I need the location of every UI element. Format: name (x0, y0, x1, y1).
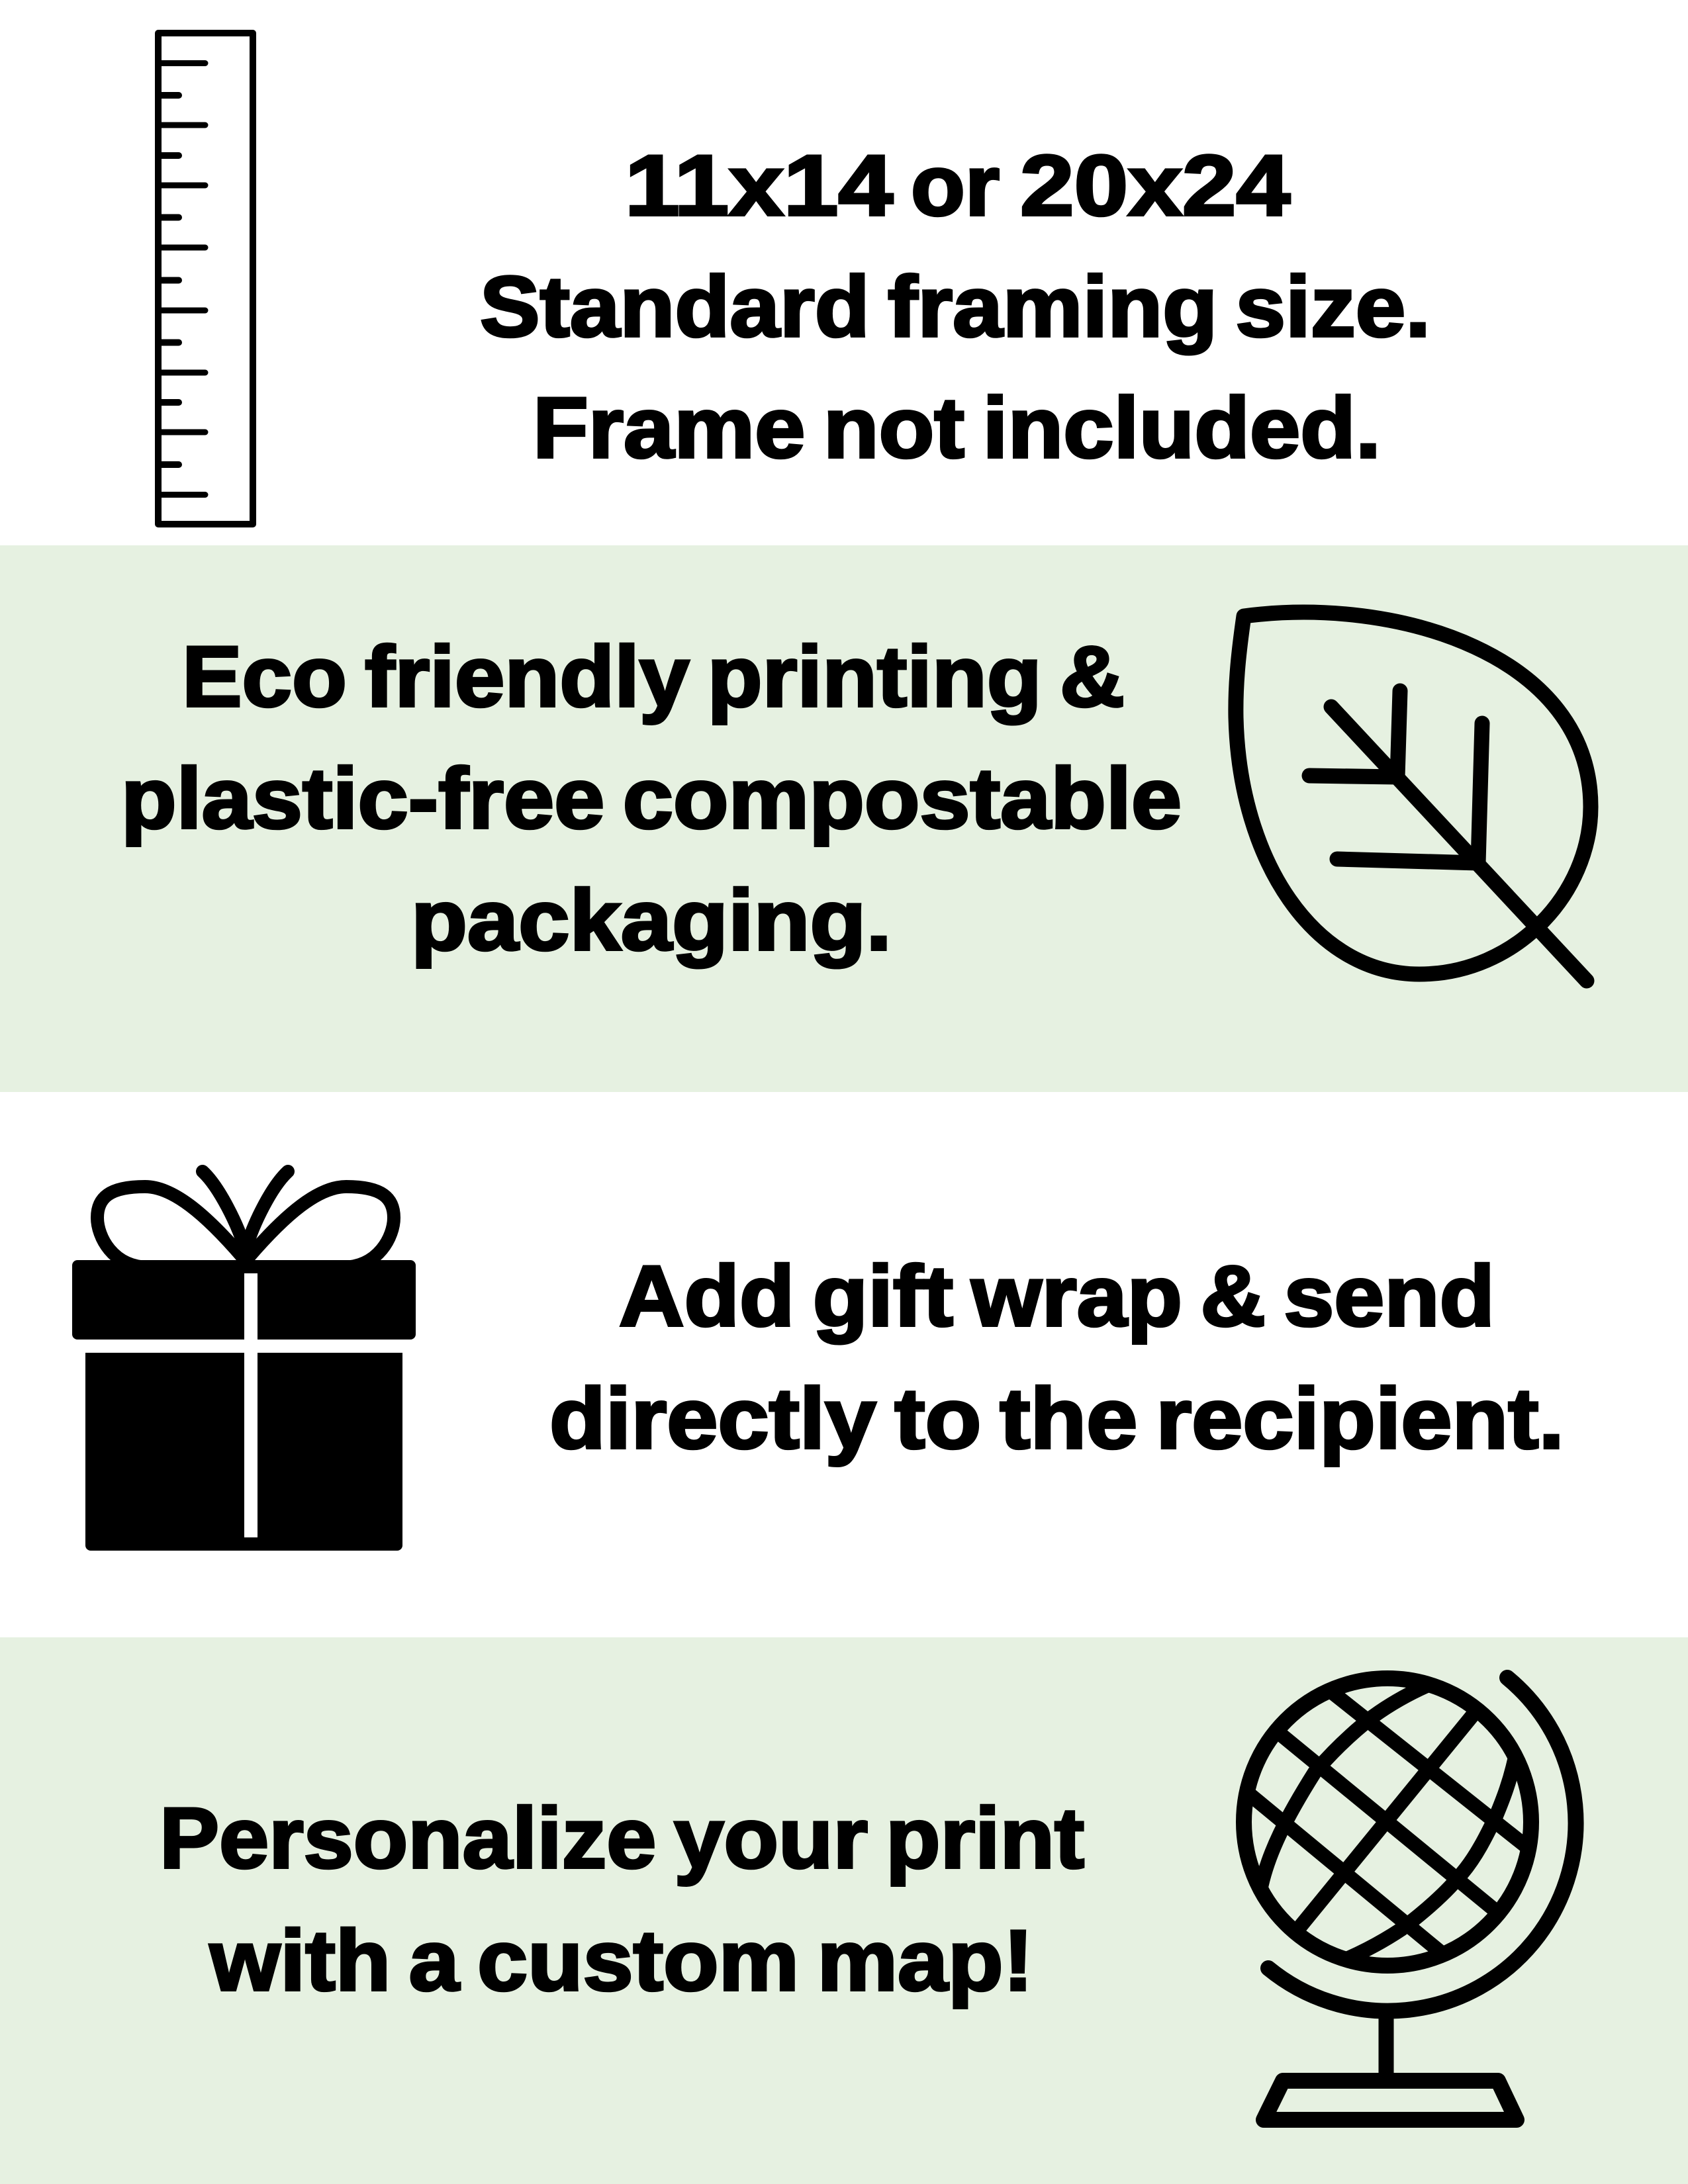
icon: ruler (158, 33, 253, 524)
text: size and framing: 11x14 (625, 137, 893, 234)
text: eco friendly: plastic-free compostable (121, 750, 1182, 846)
text: eco friendly (121, 628, 1182, 968)
text: gift wrap: Add gift wrap & send (619, 1248, 1495, 1344)
text: gift wrap (549, 1248, 1564, 1467)
panel: eco band background (0, 545, 1688, 1092)
text: personalize: Personalize your print (160, 1790, 1084, 1886)
icon: leaf (1236, 612, 1591, 981)
text: size and framing (480, 137, 1430, 476)
panel: personalize band background (0, 1637, 1688, 2184)
text: personalize (160, 1790, 1084, 2009)
icon: globe (1244, 1678, 1576, 2120)
text: size and framing: 20x24 (1020, 137, 1290, 234)
text: size and framing: or (911, 137, 1000, 234)
text: eco friendly: Eco friendly printing & (182, 628, 1125, 725)
text: size and framing: Standard framing size. (480, 258, 1430, 355)
text: eco friendly: packaging. (411, 872, 892, 968)
icon: gift box (72, 1171, 416, 1551)
text: size and framing: Frame not included. (533, 379, 1381, 476)
text: gift wrap: directly to the recipient. (549, 1370, 1564, 1467)
text: personalize: with a custom map! (209, 1912, 1033, 2009)
